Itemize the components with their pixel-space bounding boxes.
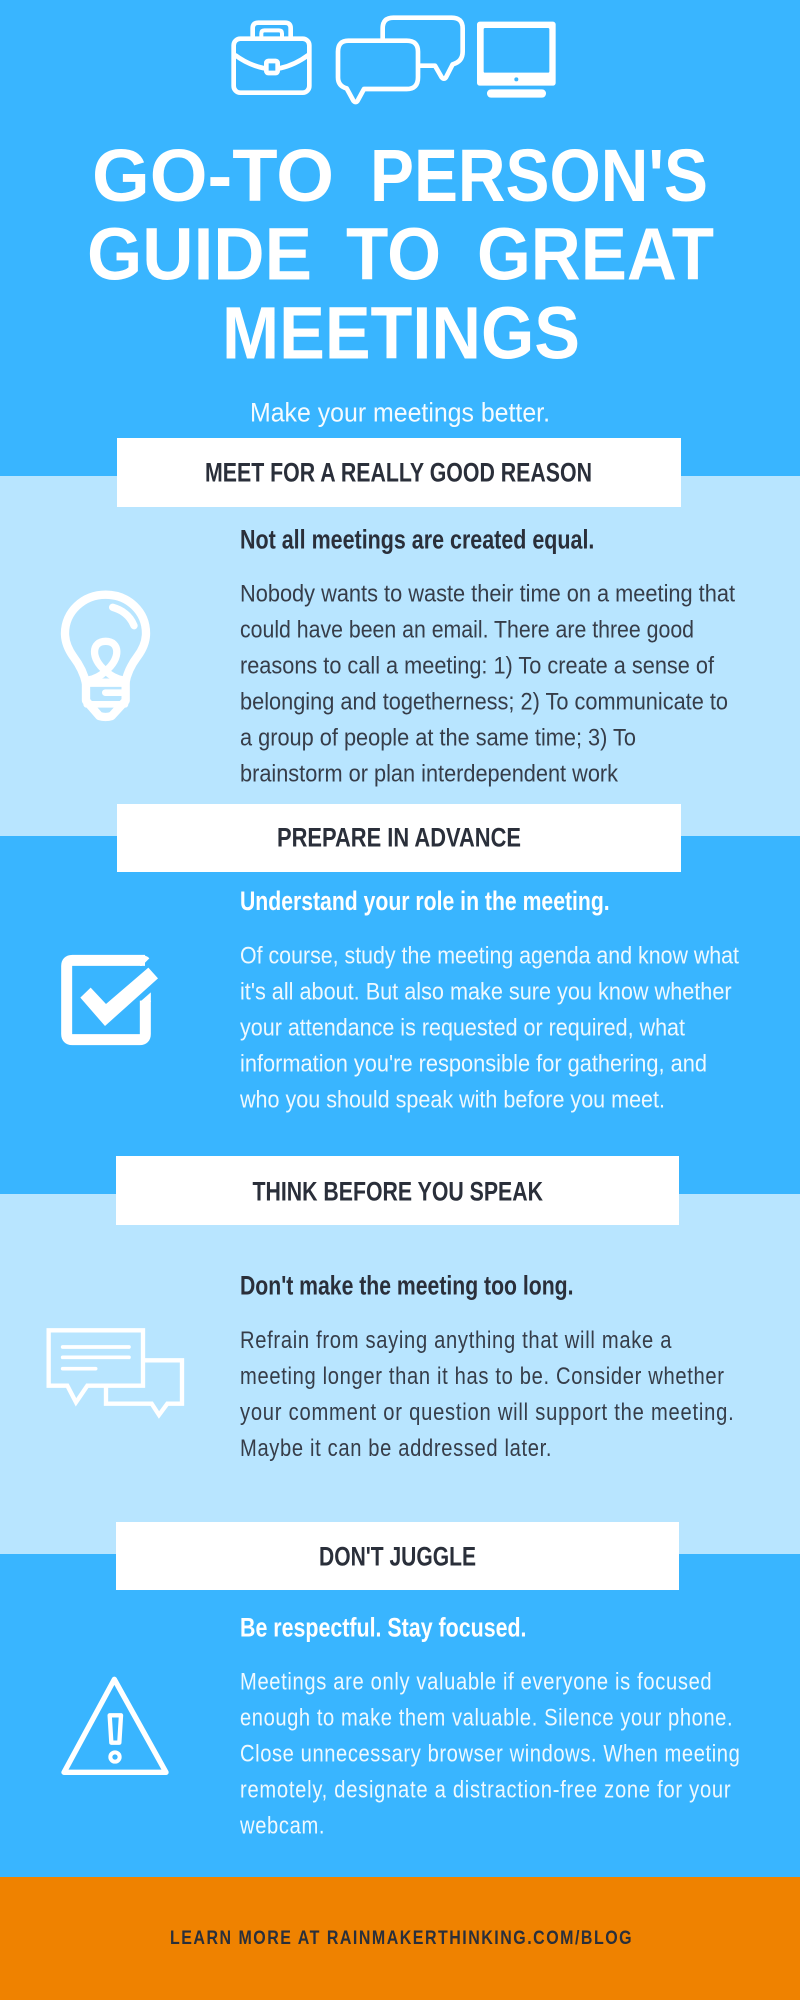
section 1 text: a group of people at the same time; 3) To [240, 725, 636, 752]
section 2 header [117, 804, 681, 872]
section 3 header: THINK BEFORE YOU SPEAK [252, 1177, 543, 1207]
header icons [234, 18, 556, 102]
icon: computer monitor [477, 22, 556, 98]
title [87, 134, 714, 374]
icon: chat bubbles with text [49, 1330, 182, 1415]
title: MEETINGS [222, 292, 580, 374]
section 2 text [239, 886, 739, 1114]
section 2 text: Understand your role in the meeting. [240, 886, 610, 916]
panel: section 4 background [0, 1554, 800, 1877]
panel: header background [0, 0, 800, 476]
section 4 text: Close unnecessary browser windows. When meeting [240, 1740, 740, 1767]
section 1 header: MEET FOR A REALLY GOOD REASON [205, 458, 592, 488]
section 1 text [240, 525, 735, 788]
section 1 text: Nobody wants to waste their time on a meeting that [240, 581, 735, 608]
section 1 header [117, 438, 681, 507]
title: TO [346, 212, 441, 296]
section 2 text: Of course, study the meeting agenda and know what [240, 943, 739, 970]
title: GREAT [477, 212, 714, 296]
panel: section 1 background [0, 476, 800, 836]
section 3 text: Refrain from saying anything that will make a [240, 1326, 672, 1353]
title: GO-TO [92, 134, 334, 217]
subtitle: Make your meetings better. [250, 398, 550, 428]
section 1 text: belonging and togetherness; 2) To communicate to [240, 689, 728, 716]
section 1 text: could have been an email. There are three good [240, 617, 694, 644]
section 3 header [116, 1156, 679, 1225]
section 2 header: PREPARE IN ADVANCE [277, 822, 521, 852]
icon: checkbox [67, 955, 158, 1040]
section 4 header: DON'T JUGGLE [319, 1542, 476, 1572]
title: GUIDE [87, 212, 312, 296]
section 2 text: who you should speak with before you meet. [239, 1087, 665, 1114]
section 4 text: Be respectful. Stay focused. [240, 1613, 526, 1643]
footer text: LEARN MORE AT RAINMAKERTHINKING.COM/BLOG [170, 1927, 632, 1948]
icon: warning triangle [64, 1679, 166, 1772]
panel: section 3 background [0, 1194, 800, 1554]
section 3 text: your comment or question will support the meeting. [240, 1398, 734, 1425]
section 4 text: Meetings are only valuable if everyone is focused [240, 1668, 712, 1695]
section 3 text: Don't make the meeting too long. [240, 1270, 574, 1300]
section 4 header [116, 1522, 679, 1590]
section 4 text: remotely, designate a distraction-free zone for your [240, 1776, 731, 1803]
section 4 text: enough to make them valuable. Silence your phone. [240, 1704, 733, 1731]
section 2 text: information you're responsible for gathering, and [240, 1051, 707, 1078]
section 1 text: Not all meetings are created equal. [240, 525, 594, 555]
section 3 text [240, 1270, 734, 1461]
section 2 text: it's all about. But also make sure you know whether [240, 979, 732, 1006]
panel: footer background [0, 1877, 800, 2000]
icon: briefcase [234, 23, 309, 93]
panel: section 2 background [0, 836, 800, 1194]
section 1 text: reasons to call a meeting: 1) To create a sense of [240, 653, 714, 680]
section 2 text: your attendance is requested or required, what [240, 1015, 685, 1042]
icon: speech bubbles [338, 18, 463, 102]
section 3 text: meeting longer than it has to be. Consider whether [240, 1362, 725, 1389]
section 4 text: webcam. [239, 1812, 325, 1839]
section 3 text: Maybe it can be addressed later. [240, 1434, 551, 1461]
section 4 text [239, 1613, 740, 1839]
icon: light bulb [65, 595, 146, 717]
title: PERSON'S [370, 134, 708, 217]
section 1 text: brainstorm or plan interdependent work [240, 761, 619, 788]
